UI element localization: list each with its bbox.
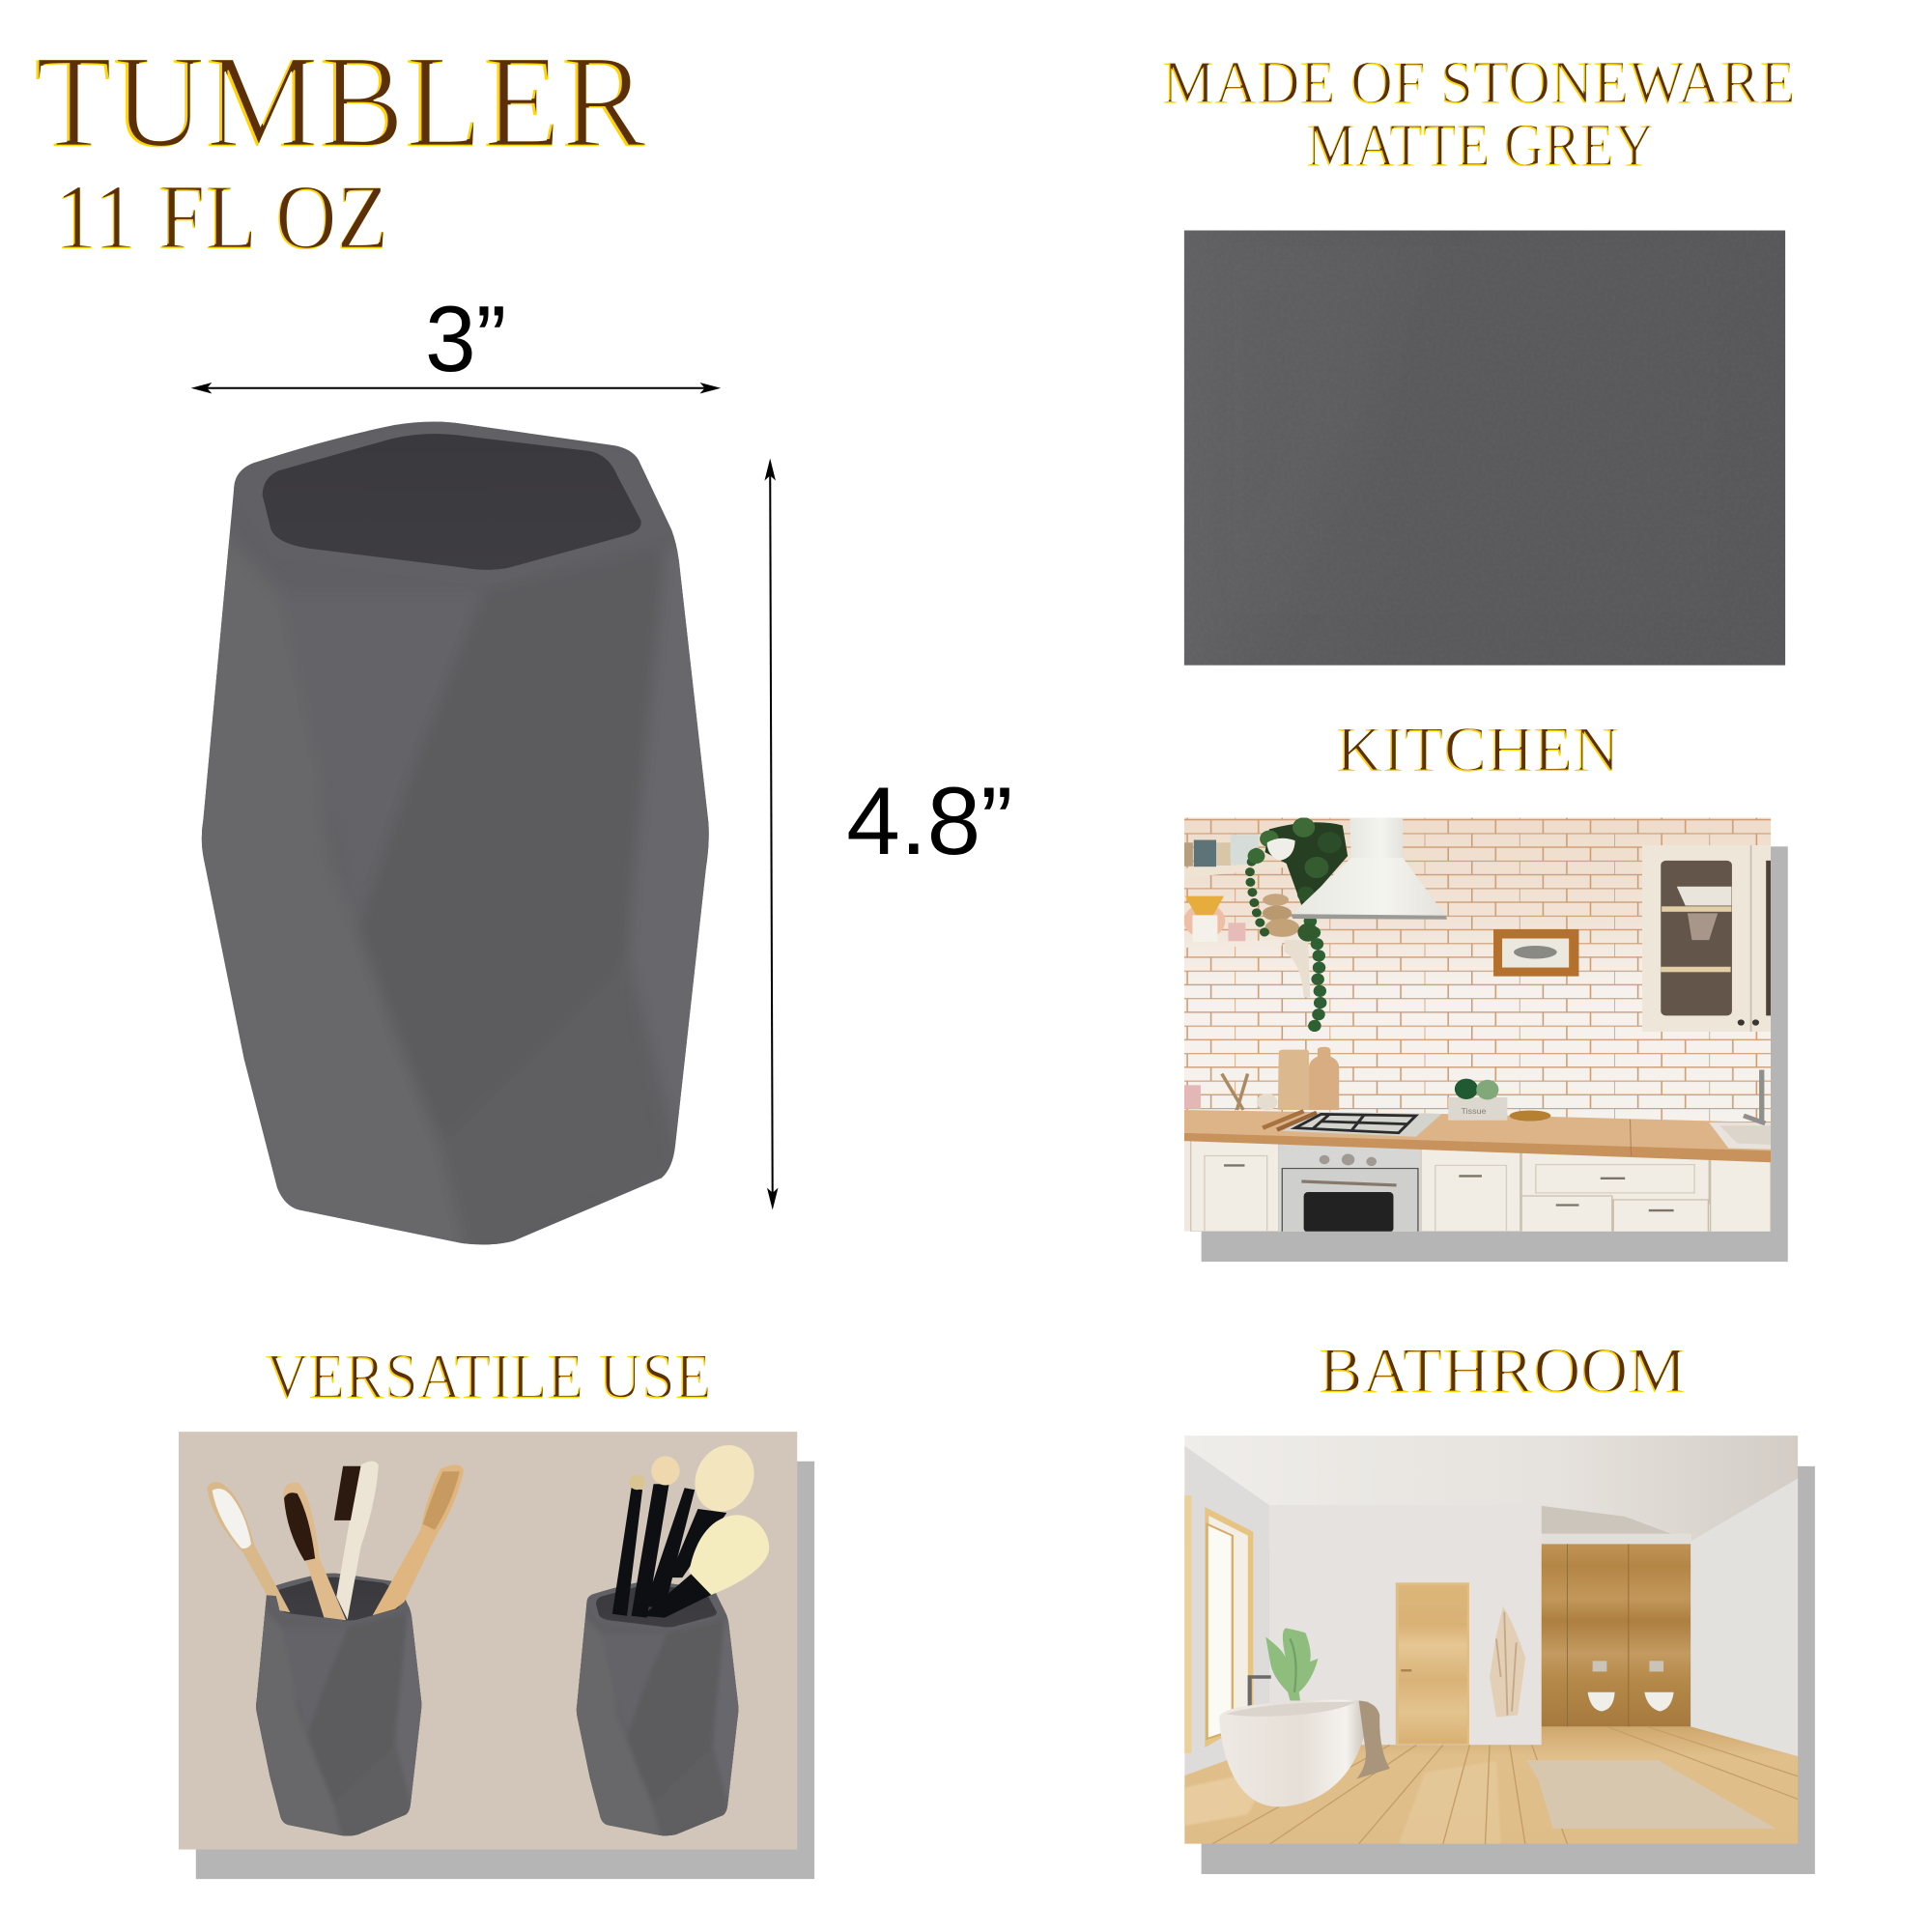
sink and faucet — [1709, 1070, 1771, 1150]
open shelves — [1184, 835, 1310, 997]
tissue box with plants: Tissue — [1462, 1106, 1487, 1116]
panel: versatile use photo with drop shadow — [179, 1432, 814, 1879]
wall picture frame — [1493, 929, 1578, 977]
subtitle: 11 FL OZ: 11 FL OZ — [54, 166, 388, 270]
alcove ceiling — [1542, 1506, 1670, 1534]
tissue box with plants — [1448, 1079, 1550, 1122]
hanging plant — [1248, 817, 1348, 1032]
width label: 3 inches: 3” — [425, 286, 506, 391]
windows — [1184, 1495, 1253, 1753]
wall cabinet — [1642, 845, 1771, 1032]
hanging towel — [1490, 1606, 1525, 1717]
left wall — [1184, 1446, 1269, 1776]
height label: 4.8 inches: 4.8” — [846, 768, 1012, 875]
gas hob — [1263, 1111, 1441, 1137]
heading: made of stoneware: MADE OF STONEWARE — [1162, 48, 1795, 117]
lower cabinets — [1184, 1139, 1771, 1235]
heading: matte grey: MATTE GREY — [1306, 111, 1654, 180]
panel: kitchen photo with drop shadow — [1184, 817, 1788, 1262]
heading: bathroom: BATHROOM — [1319, 1336, 1686, 1406]
ceiling — [1184, 1435, 1798, 1550]
heading: kitchen: KITCHEN — [1336, 715, 1619, 785]
title: TUMBLER: TUMBLER — [33, 28, 645, 176]
range hood — [1291, 818, 1447, 920]
freestanding bathtub — [1219, 1700, 1369, 1806]
countertop — [1184, 1110, 1771, 1162]
alcove lintel — [1542, 1534, 1691, 1545]
toothbrush: bamboo — [372, 1464, 464, 1616]
panel: bathroom photo with drop shadow — [1184, 1435, 1815, 1874]
panel: matte grey texture swatch — [1184, 231, 1785, 666]
floor rug — [1526, 1760, 1776, 1829]
faucet — [1250, 1677, 1271, 1707]
oven — [1279, 1141, 1420, 1234]
toothbrush: pale handle — [334, 1462, 379, 1620]
tumbler with makeup brushes — [571, 1439, 769, 1839]
right wall — [1690, 1478, 1798, 1756]
door — [1396, 1582, 1469, 1745]
main product: grey faceted tumbler — [185, 419, 727, 1257]
makeup brush handles — [612, 1484, 726, 1618]
back wall — [1269, 1505, 1542, 1745]
potted plant — [1265, 1628, 1318, 1700]
tumbler with toothbrushes — [207, 1462, 464, 1839]
arrow: width dimension — [191, 383, 721, 394]
toothbrush: white bristles — [207, 1482, 292, 1618]
cutting boards and utensils — [1184, 1047, 1339, 1110]
wood floor — [1184, 1726, 1798, 1844]
toothbrush: dark bristles — [283, 1483, 346, 1622]
makeup brush bristles — [629, 1439, 769, 1595]
heading: versatile use: VERSATILE USE — [265, 1343, 711, 1413]
brick wall — [1184, 818, 1771, 1123]
wood panel wall — [1542, 1544, 1690, 1726]
towel on bathtub — [1356, 1700, 1390, 1779]
arrow: height dimension — [764, 458, 778, 1210]
